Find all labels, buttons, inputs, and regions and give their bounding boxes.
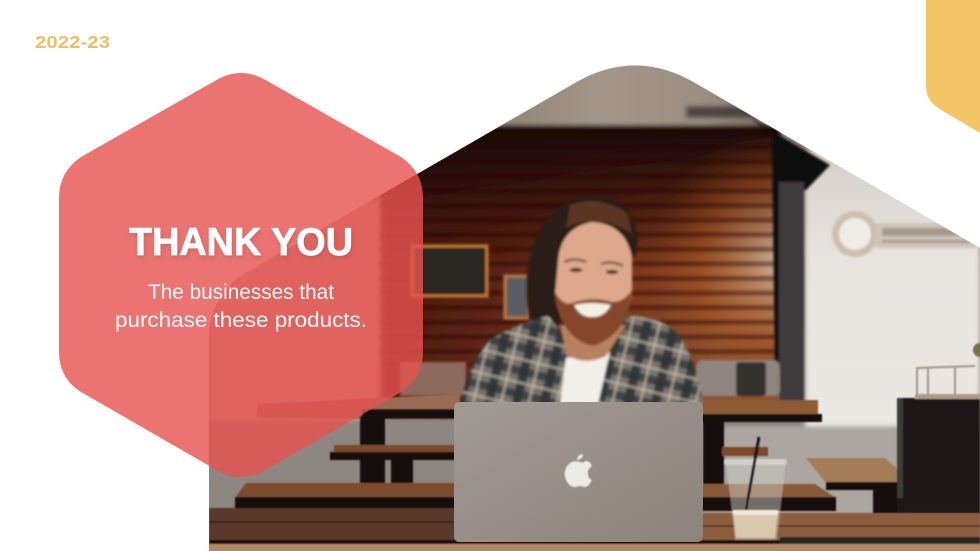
black bin and rack: [897, 343, 980, 514]
laptop: [454, 402, 703, 542]
corner accent: yellow hexagon: [926, 0, 980, 133]
panel: red hexagon: [59, 73, 423, 477]
iced coffee cup: [724, 437, 787, 540]
hair: [526, 196, 637, 335]
body text: purchase these products.: [115, 309, 367, 332]
back tables and benches: [235, 394, 914, 514]
body text: The businesses that: [148, 281, 334, 304]
photo: man with laptop in cafe: [209, 40, 980, 551]
hair highlight: [566, 201, 632, 234]
t-shirt: [560, 352, 610, 404]
smile: [574, 303, 611, 317]
body text: [115, 281, 367, 332]
wood wall slats: [380, 118, 830, 404]
man: [460, 196, 703, 404]
apple logo: [565, 454, 592, 487]
wall sign: [832, 211, 976, 257]
photo background: cafe walls: [209, 50, 980, 516]
face: [553, 220, 634, 306]
sofa cushions: [400, 360, 780, 396]
wall pictures: [412, 246, 529, 318]
neck: [560, 325, 626, 361]
shirt: [460, 316, 703, 404]
date label: 2022-23: [35, 32, 110, 52]
heading: THANK YOU: [129, 221, 353, 264]
front table: [209, 508, 980, 551]
beard: [554, 290, 632, 346]
eyes and brows: [564, 260, 623, 274]
